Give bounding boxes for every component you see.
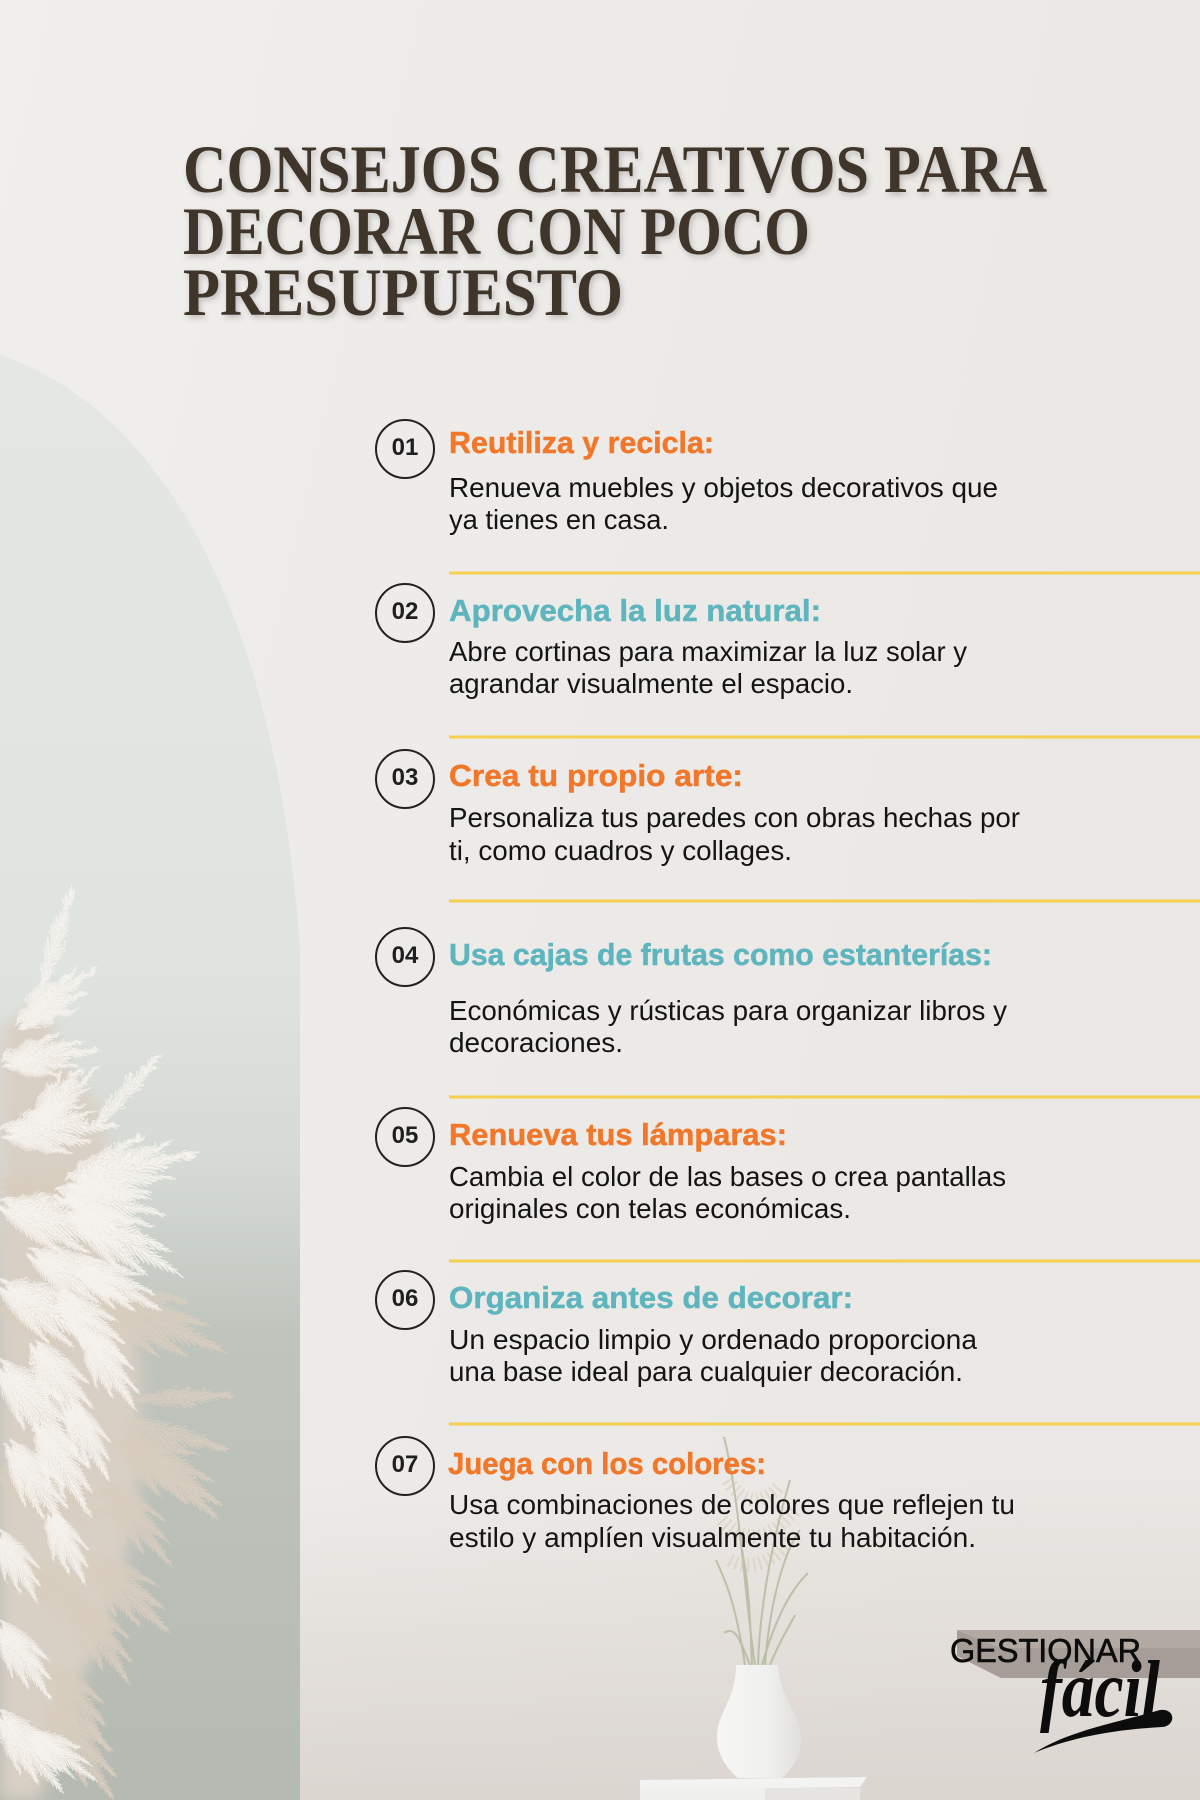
text 06: Un espacio limpio y ordenado proporciona bbox=[449, 1324, 977, 1355]
heading 07: Juega con los colores: bbox=[448, 1446, 766, 1481]
number badge 07 bbox=[376, 1437, 434, 1495]
text 06: una base ideal para cualquier decoración. bbox=[449, 1356, 963, 1387]
wall shelf bbox=[957, 1630, 1200, 1678]
text 07: estilo y amplíen visualmente tu habitación. bbox=[449, 1522, 976, 1553]
text 03: Personaliza tus paredes con obras hechas por bbox=[449, 802, 1020, 833]
title bbox=[183, 131, 1047, 330]
number badge 01 bbox=[376, 420, 434, 478]
text 04: decoraciones. bbox=[449, 1027, 623, 1058]
number badge 06: 06 bbox=[392, 1285, 418, 1312]
number badge 06 bbox=[376, 1271, 434, 1329]
text 01 bbox=[449, 472, 998, 535]
number badge 04 bbox=[376, 928, 434, 986]
text 05 bbox=[449, 1161, 1006, 1224]
title: DECORAR CON POCO bbox=[183, 193, 810, 269]
number badge 05: 05 bbox=[392, 1122, 418, 1149]
title: PRESUPUESTO bbox=[183, 254, 623, 330]
text 05: Cambia el color de las bases o crea pantallas bbox=[449, 1161, 1006, 1192]
number badge 02: 02 bbox=[392, 598, 418, 625]
tip 04 bbox=[376, 928, 1007, 1058]
text 01: ya tienes en casa. bbox=[449, 504, 669, 535]
heading 01: Reutiliza y recicla: bbox=[449, 425, 714, 460]
heading 02: Aprovecha la luz natural: bbox=[449, 593, 821, 628]
tip 01 bbox=[376, 420, 998, 535]
text 06 bbox=[449, 1324, 977, 1387]
logo: Gestionar Fácil bbox=[950, 1632, 1172, 1753]
text 03: ti, como cuadros y collages. bbox=[449, 835, 792, 866]
tip 05 bbox=[376, 1108, 1006, 1224]
text 01: Renueva muebles y objetos decorativos que bbox=[449, 472, 998, 503]
tip 03 bbox=[376, 750, 1020, 866]
number badge 03 bbox=[376, 750, 434, 808]
text 04 bbox=[449, 995, 1007, 1058]
logo: Gestionar Fácil: GESTIONAR bbox=[950, 1632, 1141, 1669]
number badge 03: 03 bbox=[392, 764, 418, 791]
number badge 01: 01 bbox=[392, 434, 418, 461]
pampas grass plant bbox=[0, 882, 244, 1800]
number badge 02 bbox=[376, 584, 434, 642]
vase bbox=[717, 1665, 801, 1778]
plant stems and speckles behind text bbox=[716, 1437, 808, 1665]
tip 07 bbox=[376, 1437, 1015, 1553]
number badge 05 bbox=[376, 1108, 434, 1166]
text 02: Abre cortinas para maximizar la luz solar y bbox=[449, 636, 967, 667]
heading 03: Crea tu propio arte: bbox=[449, 758, 743, 793]
text 07 bbox=[449, 1489, 1015, 1553]
text 02: agrandar visualmente el espacio. bbox=[449, 668, 853, 699]
text 07: Usa combinaciones de colores que reflejen tu bbox=[449, 1489, 1015, 1520]
text 04: Económicas y rústicas para organizar libros y bbox=[449, 995, 1007, 1026]
logo: Gestionar Fácil: fácil bbox=[1040, 1644, 1160, 1733]
heading 05: Renueva tus lámparas: bbox=[449, 1117, 787, 1152]
text 02 bbox=[449, 636, 967, 699]
number badge 04: 04 bbox=[392, 942, 419, 969]
arch mirror shape bbox=[0, 355, 300, 1800]
white side table bbox=[640, 1777, 867, 1800]
number badge 07: 07 bbox=[392, 1451, 418, 1478]
text 05: originales con telas económicas. bbox=[449, 1193, 851, 1224]
tip 02 bbox=[376, 584, 967, 699]
tip 06 bbox=[376, 1271, 977, 1387]
title: CONSEJOS CREATIVOS PARA bbox=[183, 131, 1047, 207]
heading 04: Usa cajas de frutas como estanterías: bbox=[449, 937, 992, 972]
heading 06: Organiza antes de decorar: bbox=[449, 1280, 853, 1315]
text 03 bbox=[449, 802, 1020, 866]
